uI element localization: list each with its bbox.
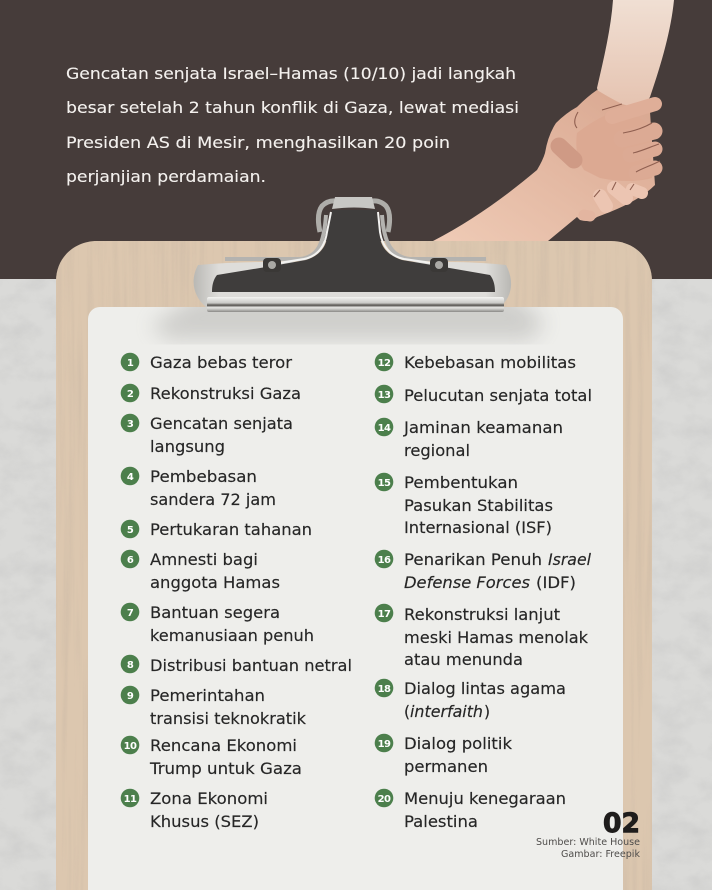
item 10: 10 xyxy=(124,741,137,752)
roller bar xyxy=(207,297,504,312)
item 20: Palestina xyxy=(404,813,478,831)
lower arm and hand xyxy=(433,90,655,241)
item 20: 20 xyxy=(378,794,391,805)
item 13: 13 xyxy=(378,390,391,401)
item 19: Dialog politik xyxy=(404,735,512,753)
intro text: Gencatan senjata Israel–Hamas (10/10) jadi langkah xyxy=(66,64,516,83)
intro text: perjanjian perdamaian. xyxy=(66,167,266,186)
item 8: 8 xyxy=(127,660,134,671)
right bolt xyxy=(430,258,448,272)
item 18 xyxy=(375,679,566,721)
item 5: Pertukaran tahanan xyxy=(150,521,312,539)
page number: 02 xyxy=(603,808,640,839)
source credits xyxy=(536,837,640,860)
item 11 xyxy=(121,789,268,831)
finger creases xyxy=(575,104,660,197)
item 16: 16 xyxy=(378,555,391,566)
item 7: Bantuan segera xyxy=(150,604,280,622)
item 18: interfaith xyxy=(410,703,483,721)
intro text: Presiden AS di Mesir, menghasilkan 20 poin xyxy=(66,133,450,152)
item 13: Pelucutan senjata total xyxy=(404,387,592,405)
item 17: atau menunda xyxy=(404,651,523,669)
item 10: Trump untuk Gaza xyxy=(149,760,302,778)
item 17: 17 xyxy=(378,609,391,620)
item 11: Zona Ekonomi xyxy=(150,790,268,808)
source credits: Sumber: White House xyxy=(536,837,640,848)
item 6: Amnesti bagi xyxy=(150,551,258,569)
item 4 xyxy=(121,467,276,509)
item 14: 14 xyxy=(378,423,391,434)
item 6: anggota Hamas xyxy=(150,574,280,592)
item 14: regional xyxy=(404,442,470,460)
item 7 xyxy=(121,603,314,645)
upper arm xyxy=(597,0,674,112)
source credits: Gambar: Freepik xyxy=(561,849,640,860)
item 4: Pembebasan xyxy=(150,468,257,486)
item 11: 11 xyxy=(124,794,137,805)
background: concrete xyxy=(0,279,712,890)
item 3: langsung xyxy=(150,438,225,456)
item 20 xyxy=(375,789,566,831)
item 9: Pemerintahan xyxy=(150,687,265,705)
item 18: 18 xyxy=(378,684,391,695)
item 7: 7 xyxy=(127,608,134,619)
item 15: Pasukan Stabilitas xyxy=(404,497,553,515)
item 16: Israel xyxy=(548,551,592,569)
image: clasped hands xyxy=(433,0,674,241)
item 8: Distribusi bantuan netral xyxy=(150,657,352,675)
item 1: 1 xyxy=(127,358,134,369)
item 17 xyxy=(375,604,588,669)
thumb xyxy=(559,146,574,160)
item 10: Rencana Ekonomi xyxy=(150,737,297,755)
item 9: transisi teknokratik xyxy=(150,710,306,728)
top cap xyxy=(332,197,375,209)
item 16: (IDF) xyxy=(536,574,576,592)
item 4: sandera 72 jam xyxy=(150,491,276,509)
dark plate xyxy=(212,210,495,292)
item 3: 3 xyxy=(127,419,134,430)
item 11: Khusus (SEZ) xyxy=(150,813,259,831)
item 18: Dialog lintas agama xyxy=(404,680,566,698)
intro text: besar setelah 2 tahun konflik di Gaza, lewat mediasi xyxy=(66,98,519,117)
item 18: ) xyxy=(484,703,490,721)
item 19: 19 xyxy=(378,739,391,750)
item 2: 2 xyxy=(127,389,134,400)
paper sheet xyxy=(88,296,623,890)
item 16: Penarikan Penuh xyxy=(404,551,542,569)
four fingers xyxy=(612,104,655,173)
item 6: 6 xyxy=(127,555,134,566)
back of gripping hand xyxy=(576,108,652,181)
item 15 xyxy=(375,473,553,537)
item 15: Internasional (ISF) xyxy=(404,519,552,537)
item 19: permanen xyxy=(404,758,488,776)
item 14: Jaminan keamanan xyxy=(403,419,563,437)
item 18: ( xyxy=(404,703,410,721)
background: dark header xyxy=(0,0,712,279)
item 9: 9 xyxy=(127,691,134,702)
metal clip xyxy=(194,197,511,312)
item 17: Rekonstruksi lanjut xyxy=(404,606,560,624)
spring loops xyxy=(318,201,390,232)
item 16: Defense Forces xyxy=(404,574,530,592)
intro text xyxy=(66,64,519,186)
item 19 xyxy=(375,734,512,776)
item 6 xyxy=(121,550,280,592)
item 15: Pembentukan xyxy=(404,474,518,492)
item 17: meski Hamas menolak xyxy=(404,629,588,647)
item 5: 5 xyxy=(127,525,134,536)
item 15: 15 xyxy=(378,478,391,489)
chrome trim xyxy=(272,212,439,264)
item 3 xyxy=(121,414,293,456)
item 20: Menuju kenegaraan xyxy=(404,790,566,808)
item 7: kemanusiaan penuh xyxy=(150,627,314,645)
fingertips below xyxy=(584,188,642,216)
left bolt xyxy=(263,258,281,272)
item 10 xyxy=(121,736,302,778)
item 1: Gaza bebas teror xyxy=(150,354,293,372)
item 14 xyxy=(375,418,563,460)
item 2: Rekonstruksi Gaza xyxy=(150,385,301,403)
item 3: Gencatan senjata xyxy=(150,415,293,433)
clipboard board xyxy=(56,241,652,890)
right column list xyxy=(375,353,592,831)
item 4: 4 xyxy=(127,472,134,483)
left column list xyxy=(121,353,352,831)
silver plate xyxy=(194,262,511,307)
item 9 xyxy=(121,686,306,728)
item 12: 12 xyxy=(378,358,391,369)
item 16 xyxy=(375,550,592,592)
wire spring xyxy=(225,215,486,259)
item 12: Kebebasan mobilitas xyxy=(404,354,576,372)
